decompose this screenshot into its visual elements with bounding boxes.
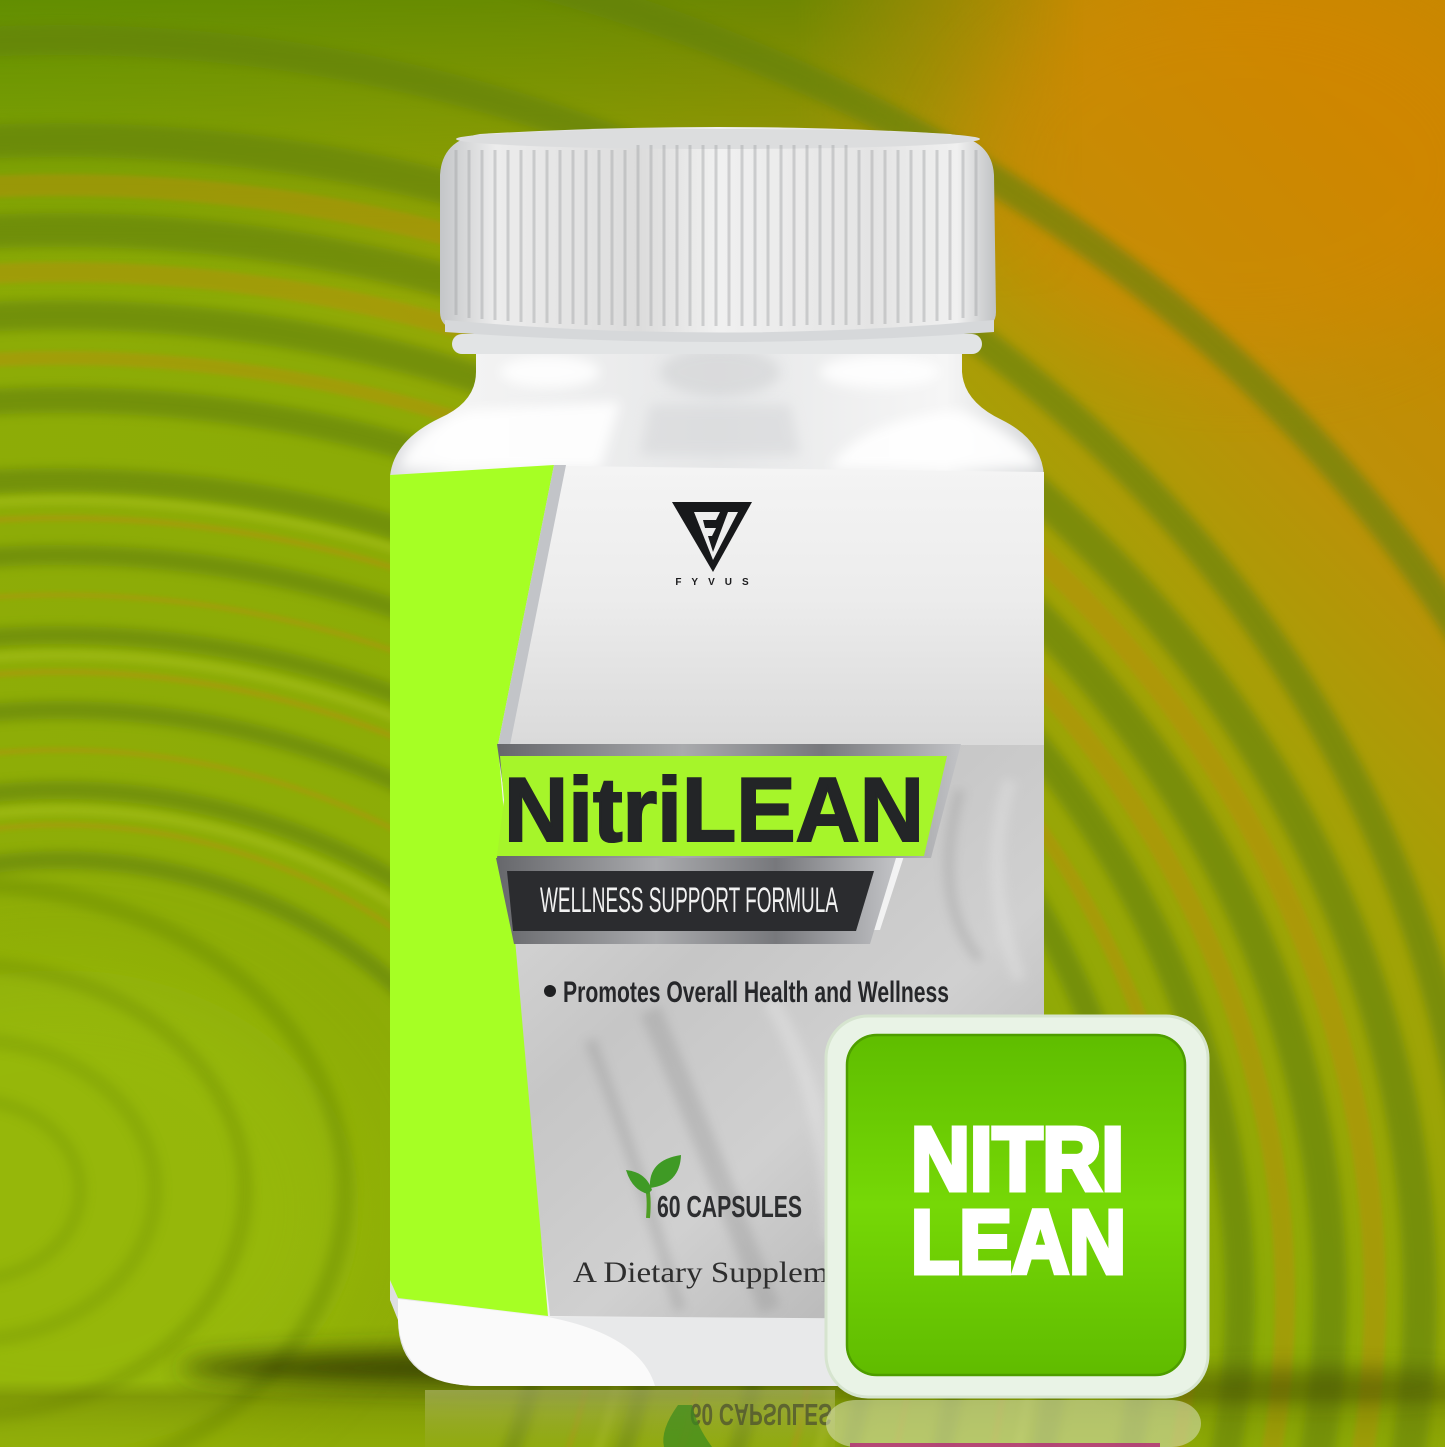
product name banner: NitriLEAN: [504, 760, 924, 861]
white label panel: [500, 466, 1044, 760]
reflected leaf: [663, 1405, 712, 1447]
bottle shoulder and body: [390, 340, 1044, 1386]
badge wordmark: NITRI: [911, 1110, 1124, 1210]
badge frame: [826, 1016, 1208, 1397]
brand logo: FYVUS: FYVUS: [675, 577, 759, 588]
capsule count with leaf icon: 60 CAPSULES: [657, 1189, 802, 1224]
ground shadow: [0, 1348, 1445, 1447]
bottle reflection: [425, 1390, 1201, 1447]
dietary supplement line: A Dietary Supplement: [573, 1256, 870, 1289]
badge face: [846, 1034, 1186, 1376]
green side panel: [390, 465, 554, 1316]
icon: leaf sprout: [626, 1155, 681, 1218]
benefit bullet: Promotes Overall Health and Wellness: [563, 976, 949, 1009]
brand logo: FYVUS: [672, 502, 759, 588]
capsule count with leaf icon: [626, 1155, 802, 1224]
marble lower label: [505, 745, 1044, 1320]
reflected capsule text: 60 CAPSULES: [690, 1397, 832, 1432]
formula banner: WELLNESS SUPPORT FORMULA: [540, 881, 838, 920]
badge wordmark: LEAN: [911, 1193, 1126, 1293]
badge wordmark: [911, 1110, 1126, 1293]
cap ridges: [456, 145, 976, 326]
badge: NITRI LEAN: [826, 1016, 1208, 1397]
bottle cap: [440, 127, 996, 354]
lower base highlight: [548, 1317, 1044, 1386]
neck highlights: [400, 348, 1040, 468]
formula banner: [496, 858, 896, 944]
benefit bullet: [544, 976, 949, 1009]
bottle: [390, 340, 1044, 1386]
